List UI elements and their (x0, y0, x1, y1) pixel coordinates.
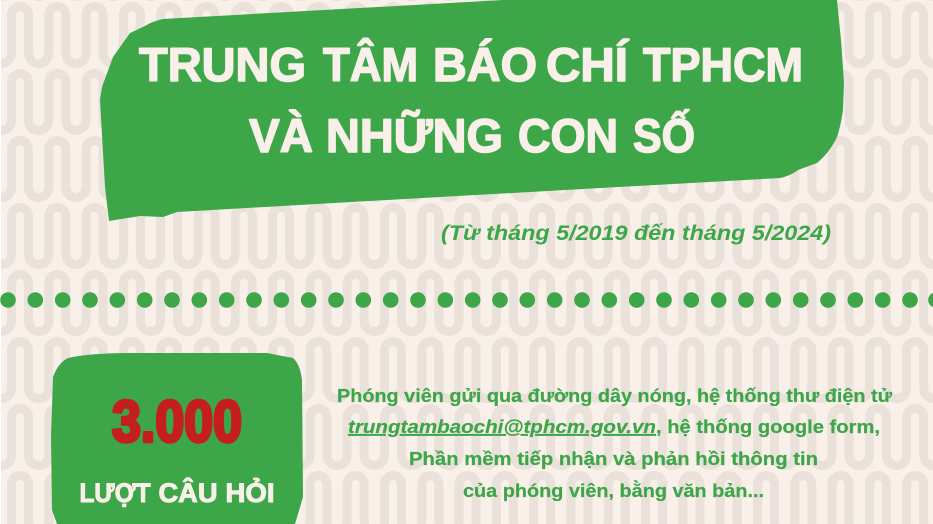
stat label (80, 478, 274, 508)
title line 1: TRUNG (139, 38, 306, 91)
title line 1: TÂM (323, 38, 418, 91)
stat number: 3.000 (112, 390, 242, 454)
stat label: HỎI (226, 478, 274, 508)
card shape (51, 353, 303, 524)
title line 2: CON (518, 109, 618, 162)
description text (337, 385, 893, 501)
banner shape (100, 0, 844, 221)
title line 2: VÀ (249, 109, 313, 162)
description line 2: , hệ thống google form, (656, 416, 880, 437)
title line 1: TPHCM (643, 38, 803, 91)
title line 2: NHỮNG (326, 109, 503, 162)
title banner (100, 0, 844, 221)
email link: trungtambaochi@tphcm.gov.vn (348, 416, 656, 437)
description line 1: Phóng viên gửi qua đường dây nóng, hệ thống thư điện tử (337, 385, 893, 406)
title line 1: CHÍ (546, 38, 630, 91)
title line 1 (139, 38, 803, 91)
description line 4: của phóng viên, bằng văn bản... (463, 480, 764, 501)
title line 2 (249, 109, 695, 162)
dotted divider (0, 292, 933, 308)
stat label: CÂU (158, 478, 218, 508)
title line 1: BÁO (433, 38, 537, 91)
stat label: LƯỢT (80, 478, 150, 508)
description line 3: Phần mềm tiếp nhận và phản hồi thông tin (409, 448, 818, 469)
stat card: questions (51, 353, 303, 524)
subtitle: date range: (Từ tháng 5/2019 đến tháng 5/2024) (441, 222, 831, 245)
title line 2: SỐ (633, 109, 695, 162)
